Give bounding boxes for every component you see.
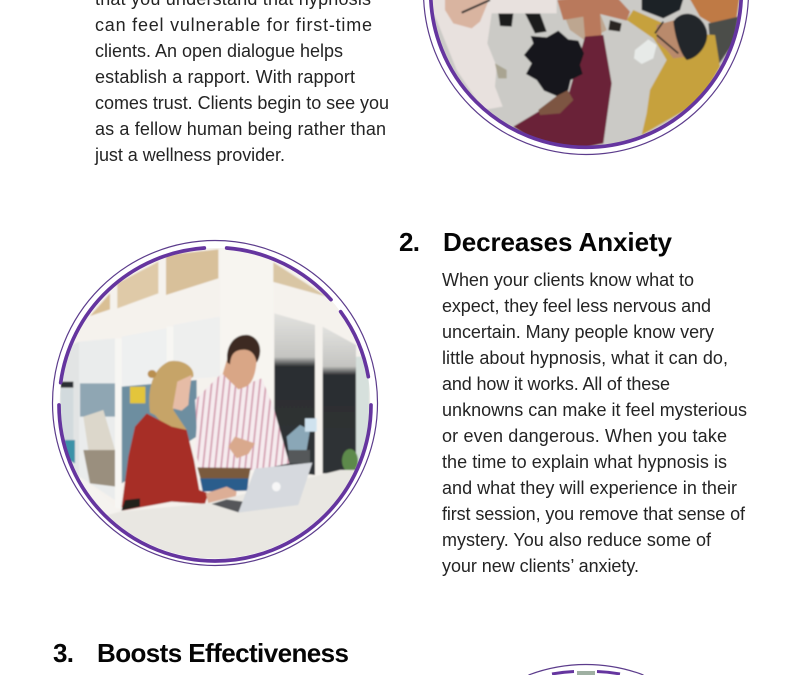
heading: 3. Boosts Effectiveness: Boosts Effectiveness [97, 638, 349, 668]
text block: point 1 continuation: establish a rapport. With rapport [95, 67, 355, 87]
woman [149, 361, 193, 430]
text block: point 2 body: unknowns can make it feel mysterious [442, 400, 747, 420]
photo circle: top edge of third image [528, 664, 644, 675]
text block: point 2 body: mystery. You also reduce some of [442, 530, 712, 550]
ring: broken purple arcs [59, 248, 371, 561]
text block: point 2 body: and what they will experience in their [442, 478, 737, 498]
text block: point 2 body: little about hypnosis, what it can do, [442, 348, 728, 368]
ring: inner purple band [431, 0, 741, 147]
ring: thin outer line [52, 240, 378, 566]
text block: point 2 body: and how it works. All of these [442, 374, 670, 394]
man [195, 373, 289, 470]
photo circle: colleagues at a laptop [52, 240, 378, 567]
text block: point 2 body: or even dangerous. When you take [442, 426, 727, 446]
table [108, 468, 355, 558]
text block: point 1 continuation: just a wellness provider. [94, 145, 285, 165]
text block: point 1 continuation: as a fellow human being rather than [95, 119, 386, 139]
photo circle: team stacking hands [420, 0, 753, 160]
ring: thin outer line [424, 0, 748, 154]
text block: point 1 continuation [94, 0, 389, 165]
text block: point 2 body: expect, they feel less nervous and [442, 296, 711, 316]
text block: point 1 continuation: can feel vulnerable for first-time [95, 15, 372, 35]
text block: point 2 body [442, 270, 747, 576]
text block: point 2 body: first session, you remove that sense of [442, 504, 746, 524]
text block: point 2 body: your new clients’ anxiety. [442, 556, 639, 576]
heading: 2. Decreases Anxiety: 2. [399, 227, 420, 257]
heading: 2. Decreases Anxiety: Decreases Anxiety [443, 227, 673, 257]
head: dreadlocks [524, 31, 584, 96]
text block: point 2 body: When your clients know what to [442, 270, 694, 290]
text block: point 2 body: uncertain. Many people know very [442, 322, 714, 342]
heading: 3. Boosts Effectiveness: 3. [53, 638, 74, 668]
text block: point 1 continuation: clients. An open dialogue helps [95, 41, 343, 61]
text block: point 2 body: the time to explain what hypnosis is [442, 452, 727, 472]
text block: point 1 continuation: comes trust. Clients begin to see you [95, 93, 389, 113]
